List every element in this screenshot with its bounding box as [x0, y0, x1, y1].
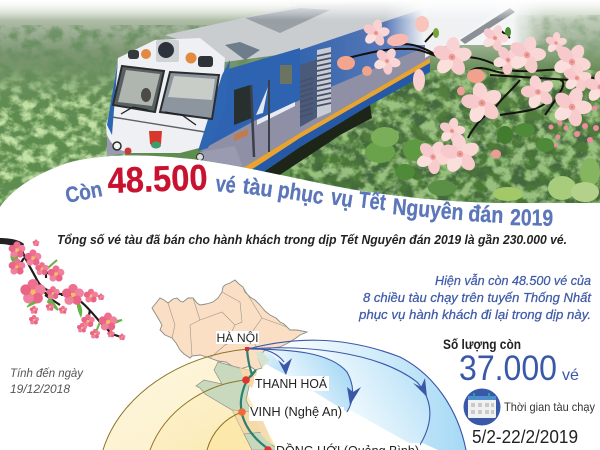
hillside foliage left	[0, 0, 300, 210]
ticket count: vé	[562, 367, 579, 384]
date note: Tính đến ngày	[10, 366, 84, 380]
title: Nguyên	[392, 193, 465, 225]
cherry blossom branch over photo	[337, 16, 600, 181]
title: phục	[276, 176, 326, 209]
city labels: THANH HOÁ	[255, 376, 327, 391]
ticket count	[443, 337, 579, 388]
remaining tickets note: phục vụ hành khách đi lại trong dịp này.	[358, 307, 591, 322]
handrail and wipers	[112, 117, 205, 132]
photo: train through green landscape	[0, 0, 600, 210]
train roof	[165, 12, 400, 62]
cab windows	[113, 66, 164, 112]
subtitle: Tổng số vé tàu đã bán cho hành khách trong dịp Tết Nguyên đán 2019 là gần 230.000 vé.	[57, 232, 567, 247]
remaining tickets note: 8 chiều tàu chạy trên tuyến Thống Nhất	[363, 290, 592, 305]
city markers	[238, 347, 272, 450]
foliage right	[290, 0, 600, 210]
arc lines blue with arrowheads	[248, 340, 466, 450]
lower lights	[113, 142, 121, 150]
route arcs to the south-east (blue)	[250, 340, 466, 450]
title: vụ	[329, 183, 355, 212]
ticket count: Số lượng còn	[443, 337, 521, 352]
blossom buds	[337, 16, 501, 158]
title: tàu	[241, 172, 275, 202]
ticket count: 37.000	[459, 349, 557, 388]
blossom cluster	[359, 17, 600, 181]
train white front	[106, 38, 225, 153]
emblem	[149, 131, 162, 145]
train blue upper body	[300, 10, 425, 87]
title: Tết	[357, 186, 388, 215]
city labels: HÀ NỘI	[216, 330, 258, 345]
remaining tickets note	[358, 273, 592, 322]
title	[63, 157, 553, 231]
title: Còn	[63, 176, 104, 208]
small pink flowers right	[548, 106, 599, 147]
map of northern and central Vietnam	[152, 280, 307, 450]
city labels: VINH (Nghệ An)	[250, 404, 342, 419]
route arcs to the south (yellow)	[103, 349, 278, 450]
train schedule: 5/2-22/2/2019	[472, 426, 578, 447]
remaining tickets note: Hiện vẫn còn 48.500 vé của	[435, 273, 591, 288]
train under-shadow	[262, 105, 372, 178]
date note	[10, 366, 84, 396]
white stripe, window and door	[257, 102, 295, 125]
date note: 19/12/2018	[10, 382, 70, 396]
icon: calendar	[464, 388, 500, 426]
title: đán	[468, 200, 504, 228]
orange stripe and blue skirt	[243, 58, 430, 172]
title: 48.500	[107, 157, 208, 201]
railway line	[241, 349, 270, 450]
city labels	[216, 330, 420, 450]
train schedule	[472, 400, 595, 447]
arc lines yellow	[103, 349, 248, 450]
train grey lower body	[200, 40, 430, 168]
headlamps and horn	[156, 40, 179, 62]
far train fade	[387, 4, 543, 45]
peach blossom branch	[0, 238, 125, 340]
title: 2019	[510, 204, 553, 231]
title: vé	[214, 170, 237, 198]
louvres	[300, 47, 331, 127]
